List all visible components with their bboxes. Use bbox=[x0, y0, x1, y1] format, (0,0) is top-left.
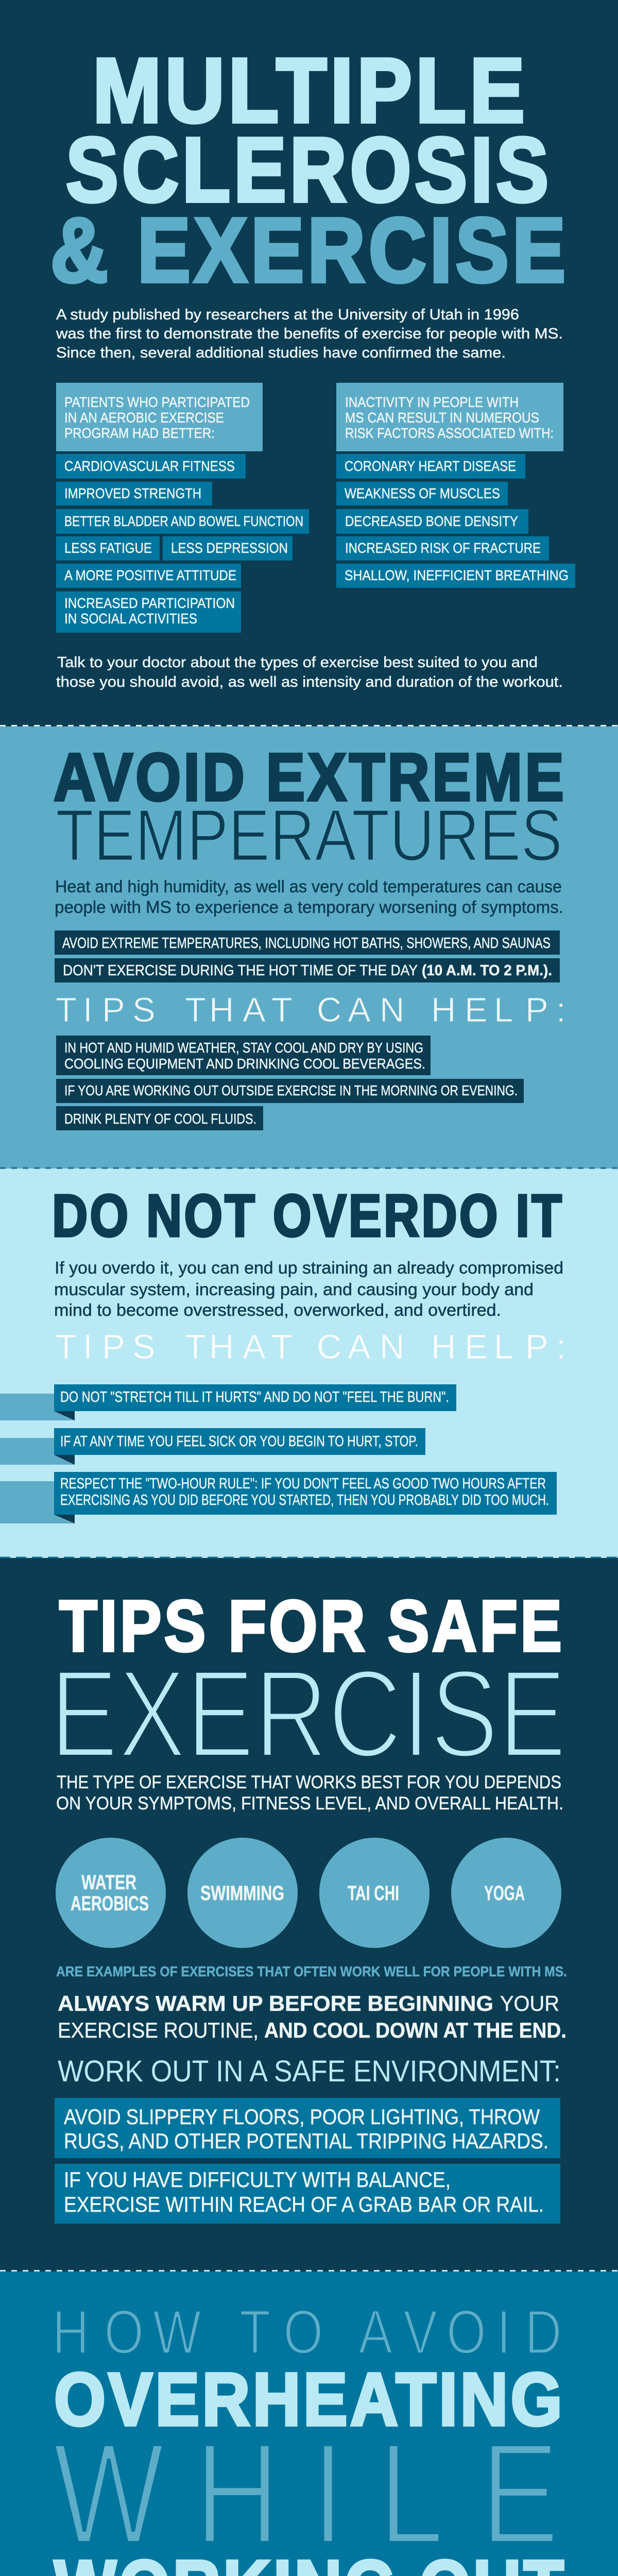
benefits heading box: PROGRAM HAD BETTER: bbox=[64, 425, 215, 441]
warning: hot time of day: (10 A.M. TO 2 P.M.). bbox=[422, 962, 552, 979]
box: balance: IF YOU HAVE DIFFICULTY WITH BALANCE, bbox=[64, 2167, 451, 2192]
intro text: Since then, several additional studies have confirmed the same. bbox=[56, 345, 506, 361]
risks heading box bbox=[336, 383, 563, 451]
benefits heading box bbox=[56, 383, 263, 451]
ribbon: two-hour rule bbox=[0, 1472, 557, 1523]
description: people with MS to experience a temporary worsening of symptoms. bbox=[55, 897, 563, 917]
circle: water aerobics bbox=[56, 1838, 166, 1948]
box: tripping hazards: AVOID SLIPPERY FLOORS, POOR LIGHTING, THROW bbox=[64, 2105, 540, 2129]
risk: shallow breathing: SHALLOW, INEFFICIENT BREATHING bbox=[345, 567, 569, 583]
risk: coronary heart disease: CORONARY HEART DISEASE bbox=[345, 458, 516, 474]
benefit: positive attitude bbox=[56, 564, 241, 588]
benefit: social activities: INCREASED PARTICIPATION bbox=[64, 595, 235, 611]
warning: hot time of day bbox=[55, 958, 560, 982]
circle: water aerobics: AEROBICS bbox=[71, 1892, 149, 1915]
benefit: improved strength bbox=[56, 482, 212, 505]
description: mind to become overstressed, overworked, and overtired. bbox=[54, 1300, 501, 1319]
risk: fracture: INCREASED RISK OF FRACTURE bbox=[345, 540, 541, 556]
panel: avoid extreme temperatures bbox=[0, 726, 618, 1168]
warm up advice bbox=[58, 1991, 566, 2042]
tip: morning or evening bbox=[56, 1079, 524, 1103]
description: ON YOUR SYMPTOMS, FITNESS LEVEL, AND OVERALL HEALTH. bbox=[56, 1793, 563, 1814]
heading: WHILE bbox=[53, 2413, 559, 2574]
risk: decreased bone density: DECREASED BONE DENSITY bbox=[345, 513, 518, 529]
risk: decreased bone density bbox=[336, 509, 528, 534]
list: benefits of exercise bbox=[56, 383, 309, 633]
benefit: social activities: IN SOCIAL ACTIVITIES bbox=[64, 611, 197, 626]
description: Heat and high humidity, as well as very cold temperatures can cause bbox=[55, 877, 562, 896]
panel: tips for safe exercise bbox=[0, 1558, 618, 2272]
benefits heading box: PATIENTS WHO PARTICIPATED bbox=[64, 394, 250, 410]
heading bbox=[50, 1585, 566, 1784]
circle: yoga: YOGA bbox=[484, 1882, 525, 1905]
intro text bbox=[56, 307, 563, 361]
ribbon: stop if sick bbox=[0, 1428, 425, 1465]
circle: water aerobics: WATER bbox=[81, 1871, 136, 1894]
box: tripping hazards bbox=[55, 2098, 560, 2158]
warm up advice: YOUR bbox=[500, 1991, 559, 2015]
box: balance: EXERCISE WITHIN REACH OF A GRAB BAR OR RAIL. bbox=[64, 2192, 544, 2216]
risks heading box: MS CAN RESULT IN NUMEROUS bbox=[345, 410, 539, 426]
tip: fluids: DRINK PLENTY OF COOL FLUIDS. bbox=[64, 1111, 256, 1127]
circle: tai chi bbox=[319, 1838, 430, 1948]
panel: introduction bbox=[0, 0, 618, 726]
warm up advice: EXERCISE ROUTINE, bbox=[58, 2018, 259, 2042]
benefit: cardiovascular fitness: CARDIOVASCULAR FITNESS bbox=[64, 458, 235, 474]
panel: how to avoid overheating bbox=[0, 2272, 618, 2576]
box: tripping hazards: RUGS, AND OTHER POTENTIAL TRIPPING HAZARDS. bbox=[64, 2129, 548, 2153]
benefits heading box: IN AN AEROBIC EXERCISE bbox=[64, 410, 224, 426]
description: If you overdo it, you can end up straining an already compromised bbox=[55, 1258, 563, 1277]
benefit: social activities bbox=[56, 591, 241, 633]
title bbox=[50, 39, 569, 301]
intro text: was the first to demonstrate the benefits of exercise for people with MS. bbox=[56, 326, 563, 342]
circle: swimming: SWIMMING bbox=[200, 1882, 284, 1905]
risks heading box: RISK FACTORS ASSOCIATED WITH: bbox=[345, 425, 554, 441]
benefit: cardiovascular fitness bbox=[56, 454, 246, 479]
risk: fracture bbox=[336, 536, 549, 561]
benefit: less fatigue: LESS FATIGUE bbox=[64, 540, 152, 556]
tip: fluids bbox=[56, 1106, 263, 1130]
ribbon: stretching: DO NOT "STRETCH TILL IT HURTS" AND DO NOT "FEEL THE BURN". bbox=[60, 1389, 449, 1405]
ribbon: stop if sick: IF AT ANY TIME YOU FEEL SICK OR YOU BEGIN TO HURT, STOP. bbox=[60, 1433, 418, 1450]
tip: morning or evening: IF YOU ARE WORKING OUT OUTSIDE EXERCISE IN THE MORNING OR EVENING. bbox=[64, 1082, 518, 1098]
list: risks of inactivity bbox=[336, 383, 575, 588]
description bbox=[55, 877, 563, 917]
circle: yoga bbox=[451, 1838, 561, 1948]
benefit: bladder and bowel bbox=[56, 509, 309, 534]
risk: weakness of muscles: WEAKNESS OF MUSCLES bbox=[345, 485, 500, 501]
benefit: less depression bbox=[163, 536, 293, 561]
box: balance bbox=[55, 2164, 560, 2224]
risk: coronary heart disease bbox=[336, 454, 525, 479]
description: muscular system, increasing pain, and causing your body and bbox=[54, 1280, 534, 1299]
title: SCLEROSIS bbox=[66, 118, 552, 221]
warm up advice: ALWAYS WARM UP BEFORE BEGINNING bbox=[58, 1991, 493, 2015]
circle: tai chi: TAI CHI bbox=[348, 1882, 399, 1905]
heading: HOW TO AVOID bbox=[52, 2298, 562, 2367]
ribbon: stretching bbox=[0, 1384, 456, 1420]
benefit: positive attitude: A MORE POSITIVE ATTITUDE bbox=[64, 567, 236, 583]
warning: hot time of day: DON'T EXERCISE DURING THE HOT TIME OF THE DAY bbox=[63, 962, 418, 979]
benefit: improved strength: IMPROVED STRENGTH bbox=[64, 485, 201, 501]
warm up advice: AND COOL DOWN AT THE END. bbox=[264, 2018, 566, 2042]
warning: hot baths bbox=[55, 930, 560, 955]
doctor advice text bbox=[56, 654, 563, 690]
doctor advice text: those you should avoid, as well as intensity and duration of the workout. bbox=[56, 674, 563, 690]
benefit: less fatigue bbox=[56, 536, 160, 561]
tip: stay cool: IN HOT AND HUMID WEATHER, STAY COOL AND DRY BY USING bbox=[64, 1040, 423, 1056]
intro text: A study published by researchers at the University of Utah in 1996 bbox=[56, 307, 519, 323]
tip: stay cool bbox=[56, 1036, 431, 1075]
doctor advice text: Talk to your doctor about the types of exercise best suited to you and bbox=[57, 654, 538, 671]
benefit: bladder and bowel: BETTER BLADDER AND BOWEL FUNCTION bbox=[64, 513, 303, 529]
risk: shallow breathing bbox=[336, 564, 575, 588]
description bbox=[56, 1772, 563, 1814]
panel: do not overdo it bbox=[0, 1168, 618, 1558]
benefit: less depression: LESS DEPRESSION bbox=[171, 540, 288, 556]
heading bbox=[52, 2298, 566, 2576]
risks heading box: INACTIVITY IN PEOPLE WITH bbox=[345, 394, 519, 410]
heading: OVERHEATING bbox=[54, 2358, 565, 2441]
description: THE TYPE OF EXERCISE THAT WORKS BEST FOR YOU DEPENDS bbox=[57, 1772, 561, 1792]
subheading: safe environment: WORK OUT IN A SAFE ENVIRONMENT: bbox=[58, 2055, 561, 2088]
heading bbox=[54, 739, 566, 876]
tip: stay cool: COOLING EQUIPMENT AND DRINKING COOL BEVERAGES. bbox=[64, 1056, 425, 1072]
risk: weakness of muscles bbox=[336, 482, 508, 505]
circle: swimming bbox=[187, 1838, 298, 1948]
tips heading: TIPS THAT CAN HELP: bbox=[56, 1328, 566, 1366]
description bbox=[54, 1258, 563, 1319]
tips heading: TIPS THAT CAN HELP: bbox=[56, 991, 566, 1029]
title: MULTIPLE bbox=[93, 39, 528, 141]
